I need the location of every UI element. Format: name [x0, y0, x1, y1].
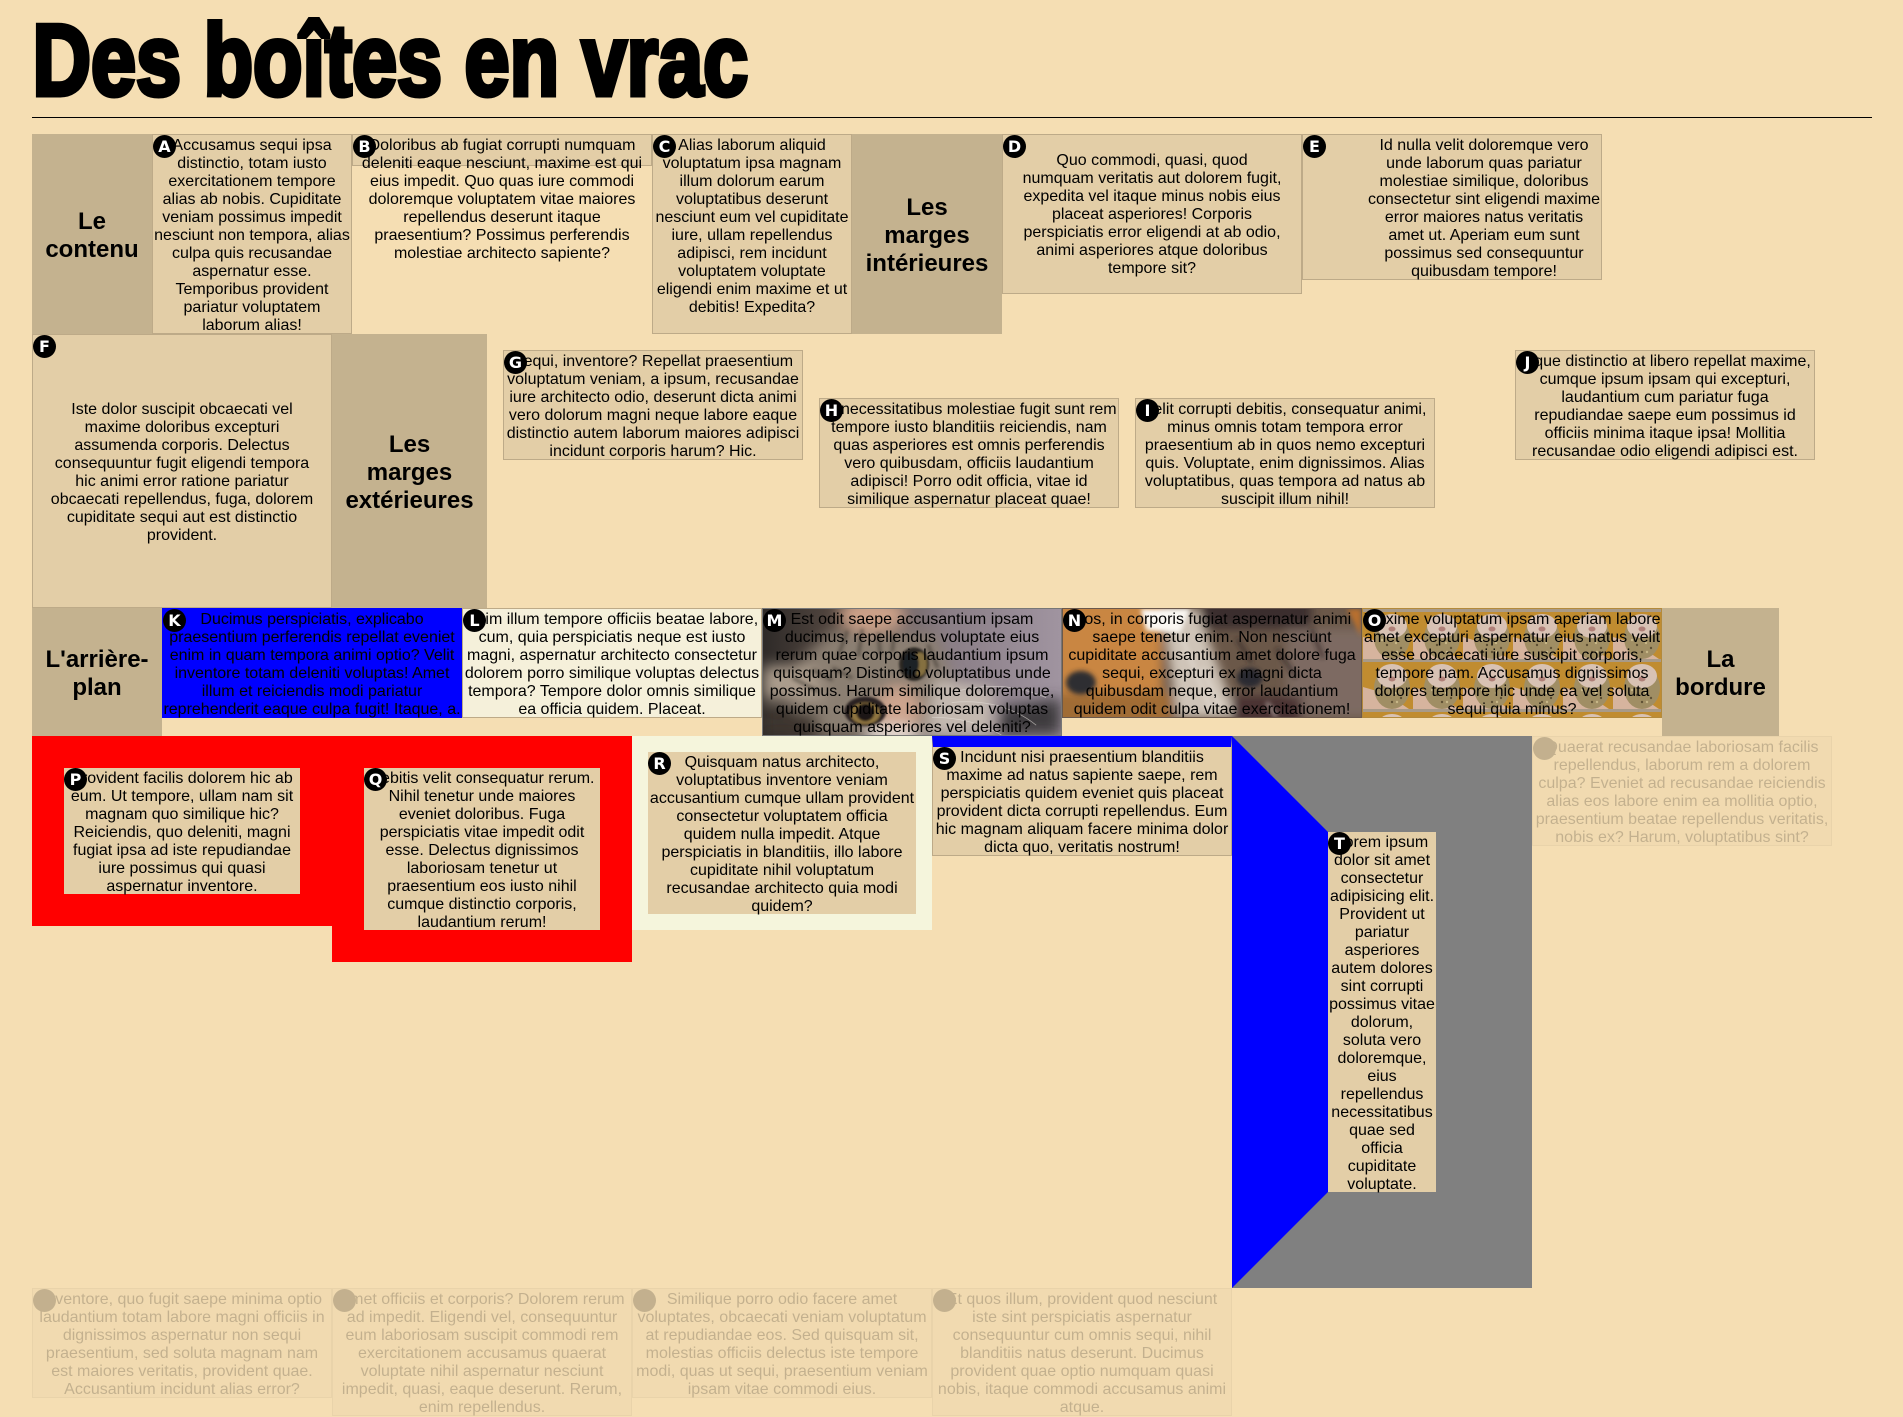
badge G [504, 351, 527, 374]
panel: box E [1302, 134, 1602, 280]
badge D [1003, 135, 1026, 158]
text S: Incidunt nisi praesentium blanditiis maxime ad natus sapiente saepe, rem perspiciatis quidem eveniet quis placeat provident dicta corrupti repellendus. Eum hic magnam aliquam facere minima dolor dicta quo, veritatis nostrum! [936, 749, 1228, 856]
badge C: C [659, 137, 670, 156]
heading: Les marges intérieures [852, 134, 1002, 334]
heading: Les marges extérieures: extérieures [345, 487, 474, 514]
heading: L'arrière-plan: L'arrière- [45, 646, 149, 673]
panel: box M cat image background [762, 608, 1062, 736]
text K: Ducimus perspiciatis, explicabo praesentium perferendis repellat eveniet enim in quam tempora animi optio? Velit inventore totam deleniti voluptas! Amet illum et reiciendis modi pariatur reprehenderit eaque culpa fugit! Itaque, a. [163, 611, 461, 718]
heading: Le contenu: Le [78, 208, 106, 235]
panel: box P red border [32, 736, 332, 926]
panel: box H [819, 398, 1119, 508]
badge R [648, 752, 671, 775]
panel: box J [1515, 350, 1815, 460]
badge E: E [1309, 137, 1320, 156]
text V [39, 1291, 325, 1398]
panel: box N dog image background [1062, 608, 1362, 718]
heading: Les marges extérieures: Les [389, 431, 430, 458]
panel: faded box U [1532, 736, 1832, 846]
badge M: M [767, 611, 782, 630]
text N: Nos, in corporis fugiat aspernatur animi saepe tenetur enim. Non nesciunt cupiditate accusantium amet dolore fuga sequi, excepturi ex magni dicta quibusdam neque, error laudantium quidem odit culpa vitae exercitationem! [1068, 611, 1356, 718]
panel: faded box Y [932, 1288, 1232, 1416]
badge B [353, 135, 376, 158]
badge J: J [1525, 353, 1530, 372]
heading: La bordure: La [1706, 646, 1734, 673]
badge N: N [1068, 611, 1081, 630]
badge Q: Q [369, 770, 382, 789]
panel: box C [652, 134, 852, 334]
panel: box I [1135, 398, 1435, 508]
empty badge W [333, 1289, 356, 1312]
text Q: Debitis velit consequatur rerum. Nihil tenetur unde maiores eveniet doloribus. Fuga perspiciatis vitae impedit odit esse. Delectus dignissimos laboriosam tenetur ut praesentium eos iusto nihil cumque distinctio corporis, laudantium rerum! [370, 770, 594, 931]
badge L [463, 609, 486, 632]
badge M [763, 609, 786, 632]
panel: box A [152, 134, 352, 334]
panel: faded box W [332, 1288, 632, 1416]
panel: box G [503, 350, 803, 460]
text P: Provident facilis dolorem hic ab eum. Ut tempore, ullam nam sit magnam quo similique hic? Reiciendis, quo deleniti, magni fugiat ipsa ad iste repudiandae iure possimus qui quasi aspernatur inventore. [71, 770, 293, 895]
panel: faded box X [632, 1288, 932, 1398]
badge K [163, 609, 186, 632]
heading: Les marges extérieures [332, 334, 487, 608]
badge I: I [1145, 401, 1150, 420]
badge A: A [158, 137, 171, 156]
heading: Le contenu: contenu [45, 236, 139, 263]
text A: Accusamus sequi ipsa distinctio, totam iusto exercitationem tempore alias ab nobis. Cupiditate veniam possimus impedit nesciunt non tempora, alias culpa quis recusandae aspernatur esse. Temporibus provident pariatur voluptatem laborum alias! [154, 137, 350, 334]
text C: Alias laborum aliquid voluptatum ipsa magnam illum dolorum earum voluptatibus deserunt nesciunt eum vel cupiditate iure, ullam repellendus adipisci, rem incidunt voluptatem voluptate eligendi enim maxime et ut debitis! Expedita? [656, 137, 848, 316]
badge R: R [653, 754, 666, 773]
badge B: B [358, 137, 371, 156]
text W: Amet officiis et corporis? Dolorem rerum ad impedit. Eligendi vel, consequuntur eum laboriosam suscipit commodi rem exercitationem accusamus quaerat voluptate nihil aspernatur nesciunt impedit, quasi, eaque deserunt. Rerum, enim repellendus. [339, 1291, 625, 1416]
badge H: H [825, 401, 838, 420]
heading: La bordure [1662, 608, 1779, 736]
panel: box S blue top border [932, 736, 1232, 856]
panel: box L beige background [462, 608, 762, 718]
panel: box F [32, 334, 332, 608]
text F: Iste dolor suscipit obcaecati vel maxime doloribus excepturi assumenda corporis. Delectus consequuntur fugit eligendi tempora hic animi error ratione pariatur obcaecati repellendus, fuga, dolorem cupiditate sequi aut est distinctio provident. [51, 401, 313, 544]
badge S: S [939, 749, 950, 768]
text J: Atque distinctio at libero repellat maxime, cumque ipsum ipsam qui excepturi, laudantium cum pariatur fuga repudiandae saepe eum possimus id officiis minima itaque ipsa! Mollitia recusandae odio eligendi adipisci est. [1519, 353, 1811, 460]
badge S [933, 747, 956, 770]
badge O: O [1368, 611, 1381, 630]
image: cat [763, 609, 1061, 735]
panel: box O hedgehog tiled background [1362, 608, 1662, 718]
badge A [153, 135, 176, 158]
text V: est maiores veritatis, provident quae. Accusantium incidunt alias error? [51, 1363, 313, 1398]
empty badge U [1533, 737, 1556, 760]
badge E [1303, 135, 1326, 158]
text E: Id nulla velit doloremque vero unde laborum quas pariatur molestiae similique, doloribus consectetur sint eligendi maxime error maiores natus veritatis amet ut. Aperiam eum sunt possimus sed consequuntur quibusdam tempore! [1368, 137, 1600, 280]
text G: Sequi, inventore? Repellat praesentium voluptatum veniam, a ipsum, recusandae iure architecto odio, deserunt dicta animi vero dolorum magni neque labore eaque distinctio autem laborum maiores adipisci incidunt corporis harum? Hic. [507, 353, 799, 460]
panel: box T thick blue and grey borders [1232, 736, 1532, 1288]
badge O [1363, 609, 1386, 632]
empty badge Y [933, 1289, 956, 1312]
heading: Les marges intérieures: intérieures [866, 250, 988, 277]
text X: Similique porro odio facere amet voluptates, obcaecati veniam voluptatum at repudiandae eos. Sed quisquam sit, molestias officiis delectus iste tempore modi, quas ut sequi, praesentium veniam ipsam vitae commodi eius. [636, 1291, 928, 1398]
text I: Velit corrupti debitis, consequatur animi, minus omnis totam tempora error praesentium ab in quos nemo excepturi quis. Voluptate, enim dignissimos. Alias voluptatibus, quas tempora ad natus ab suscipit illum nihil! [1144, 401, 1426, 508]
empty badge X [633, 1289, 656, 1312]
badge L: L [469, 611, 480, 630]
badge H [820, 399, 843, 422]
text L: Enim illum tempore officiis beatae labore, cum, quia perspiciatis neque est iusto magni, aspernatur architecto consectetur dolorem porro similique voluptas delectus tempora? Tempore dolor omnis similique ea officia quidem. Placeat. [465, 611, 759, 718]
text D: Quo commodi, quasi, quod numquam veritatis aut dolorem fugit, expedita vel itaque minus nobis eius placeat asperiores! Corporis perspiciatis error eligendi at ab odio, animi asperiores atque doloribus tempore sit? [1023, 152, 1281, 277]
empty badge V [33, 1289, 56, 1312]
panel: box Q red border [332, 736, 632, 962]
panel: box K blue background [162, 608, 462, 718]
heading: L'arrière-plan [32, 608, 162, 736]
text R: Quisquam natus architecto, voluptatibus inventore veniam accusantium cumque ullam provident consectetur voluptatem officia quidem nulla impedit. Atque perspiciatis in blanditiis, illo labore cupiditate nihil voluptatum recusandae architecto quia modi quidem? [650, 754, 914, 915]
badge I [1136, 399, 1159, 422]
badge G: G [509, 353, 522, 372]
image: tiled hedgehog [1363, 609, 1661, 717]
heading: Les marges intérieures: Les [906, 194, 948, 221]
text O: Maxime voluptatum ipsam aperiam labore amet excepturi aspernatur eius natus velit esse obcaecati iure suscipit corporis, tempore nam. Accusamus dignissimos dolores tempore hic unde ea vel soluta sequi quia minus? [1363, 611, 1660, 718]
badge P: P [70, 770, 81, 789]
text M: Est odit saepe accusantium ipsam ducimus, repellendus voluptate eius rerum quae corporis laudantium ipsum quisquam? Distinctio voluptatibus unde possimus. Harum similique doloremque, quidem cupiditate laboriosam voluptas quisquam asperiores vel deleniti? [770, 611, 1054, 736]
text H: Et necessitatibus molestiae fugit sunt rem tempore iusto blanditiis reiciendis, nam quas asperiores est omnis perferendis vero quibusdam, officiis laudantium adipisci! Porro odit officia, vitae id similique aspernatur placeat quae! [821, 401, 1117, 508]
badge J [1516, 351, 1539, 374]
text T: Lorem ipsum dolor sit amet consectetur adipisicing elit. Provident ut pariatur asperiores autem dolores sint corrupti possimus vitae dolorum, soluta vero doloremque, eius repellendus necessitatibus quae sed officia cupiditate voluptate. [1329, 834, 1435, 1193]
text B: Doloribus ab fugiat corrupti numquam deleniti eaque nesciunt, maxime est qui eius impedit. Quo quas iure commodi doloremque voluptatem vitae maiores repellendus deserunt itaque praesentium? Possimus perferendis molestiae architecto sapiente? [362, 137, 642, 262]
badge N [1063, 609, 1086, 632]
panel: box R beige border [632, 736, 932, 930]
text U: Quaerat recusandae laboriosam facilis repellendus, laborum rem a dolorem culpa? Eveniet ad recusandae reiciendis alias eos labore enim ea mollitia optio, praesentium beatae repellendus veritatis, nobis ex? Harum, voluptatibus sint? [1536, 739, 1828, 846]
badge K: K [168, 611, 181, 630]
text V: Inventore, quo fugit saepe minima optio laudantium totam labore magni officiis in dignissimos aspernatur non sequi praesentium, sed soluta magnam nam [39, 1291, 325, 1362]
badge P [64, 768, 87, 791]
badge D: D [1008, 137, 1021, 156]
heading: La bordure: bordure [1675, 674, 1766, 701]
badge T [1328, 832, 1351, 855]
image: dog fur [1063, 609, 1361, 717]
panel: box B [352, 134, 652, 166]
badge Q [364, 768, 387, 791]
panel: box D [1002, 134, 1302, 294]
heading: Les marges extérieures: marges [367, 459, 452, 486]
badge F: F [39, 337, 50, 356]
badge C [653, 135, 676, 158]
heading: Le contenu [32, 134, 152, 334]
heading: L'arrière-plan: plan [72, 674, 122, 701]
title: Des boîtes en vrac [32, 5, 748, 117]
badge F [33, 335, 56, 358]
heading: Les marges intérieures: marges [884, 222, 970, 249]
text Y: Et quos illum, provident quod nesciunt iste sint perspiciatis aspernatur consequuntur cum omnis sequi, nihil blanditiis natus deserunt. Ducimus provident quae optio numquam quasi nobis, itaque commodi accusamus animi atque. [938, 1291, 1226, 1416]
panel: faded box V [32, 1288, 332, 1398]
badge T: T [1334, 834, 1345, 853]
